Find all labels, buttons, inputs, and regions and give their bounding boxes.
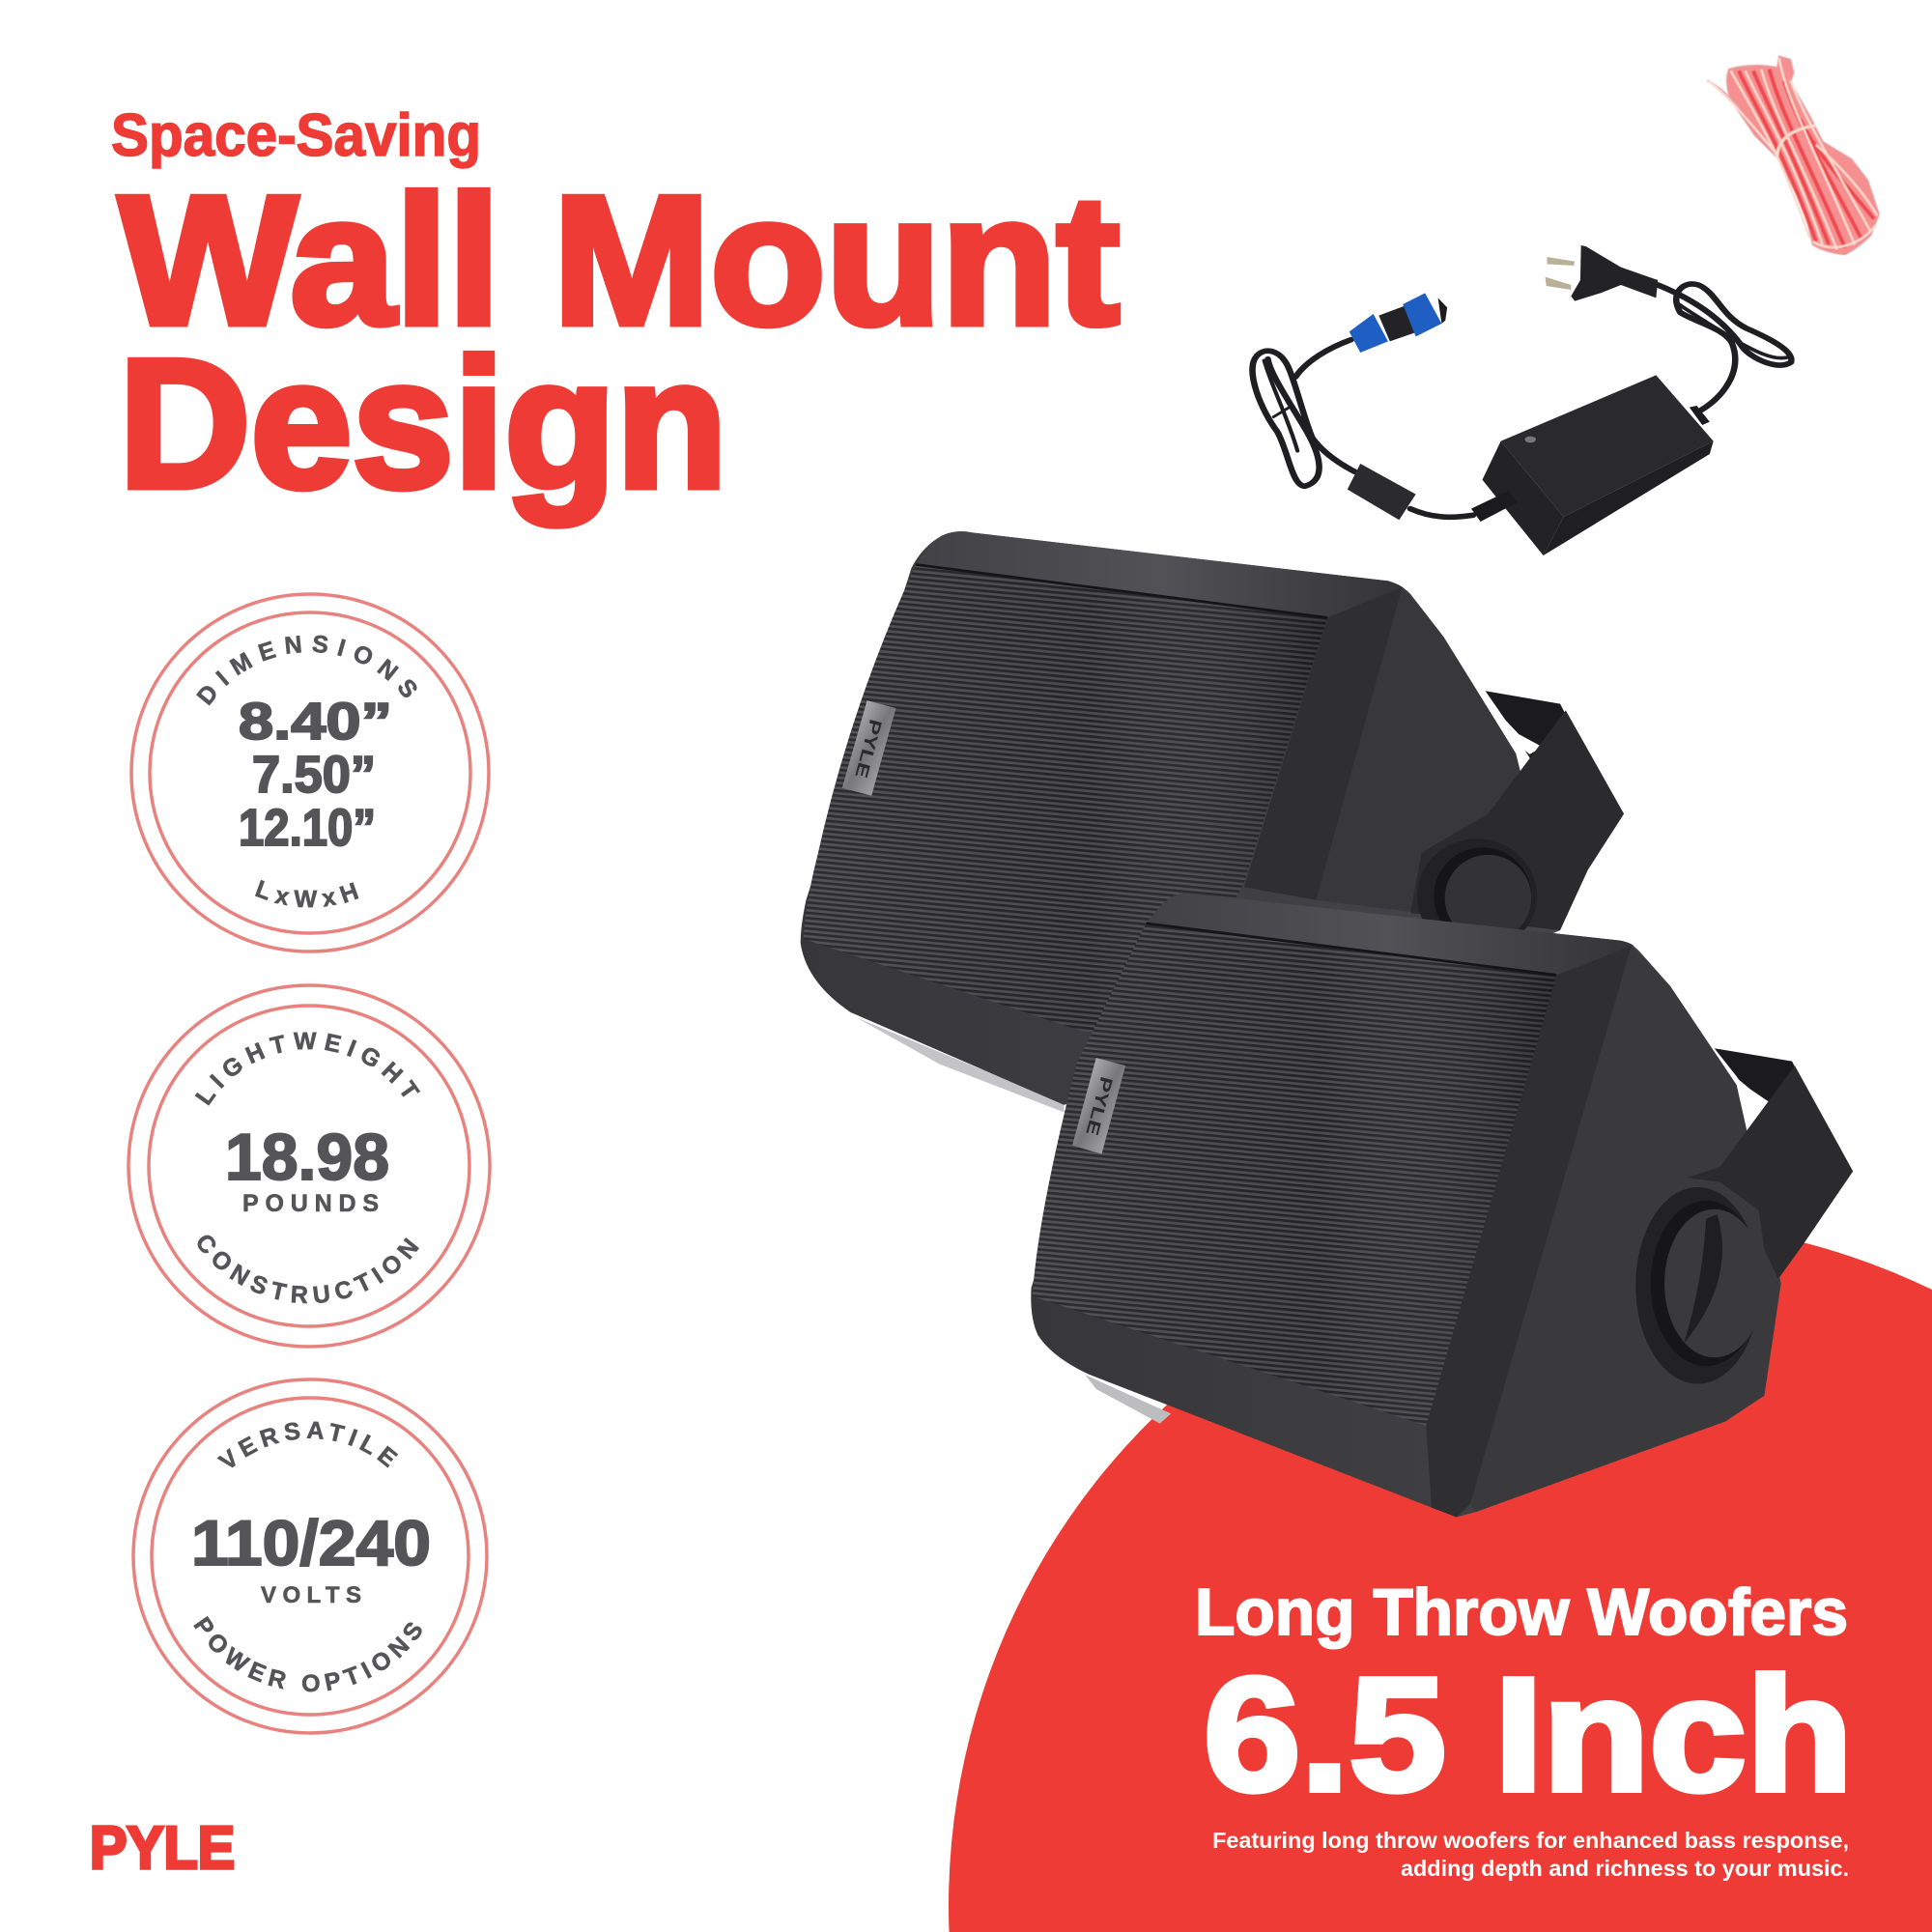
badge: lightweight: [127, 983, 492, 1349]
badge: dimensions: DIMENSIONS: [196, 636, 417, 705]
text: badge label on rear speaker: PYLE: [851, 717, 886, 781]
badge: dimensions: 7.50”: [252, 746, 376, 804]
title: Wall Mount Design: [119, 158, 1120, 526]
red circle panel: [949, 1221, 1932, 1932]
text: badge label on front speaker: PYLE: [1082, 1074, 1117, 1138]
text: woofer description: [1212, 1828, 1849, 1881]
speaker: front unit: [1031, 894, 1853, 1517]
subtitle: Space-Saving: Space-Saving: [111, 102, 481, 169]
title: Wall Mount Design: Wall Mount: [119, 158, 1120, 363]
text: woofer description: adding depth and richness to your music.: [1401, 1856, 1849, 1881]
heading: Long Throw Woofers: Long Throw Woofers: [1195, 1576, 1848, 1649]
title: Wall Mount Design: Design: [119, 322, 727, 526]
badge: lightweight: CONSTRUCTION: [197, 1235, 419, 1304]
badge: versatile: VOLTS: [261, 1582, 361, 1608]
text: woofer description: Featuring long throw woofers for enhanced bass response,: [1212, 1828, 1849, 1853]
badge: versatile: POWER OPTIONS: [193, 1615, 422, 1692]
badge: versatile: VERSATILE: [216, 1422, 398, 1468]
icon: speaker wire coil: [1707, 56, 1879, 254]
badge: dimensions: LxWxH: [255, 879, 359, 908]
badge: versatile: 110/240: [191, 1507, 431, 1578]
badge: dimensions: 8.40”: [239, 693, 392, 751]
badge: dimensions: 12.10”: [239, 799, 376, 857]
badge: versatile: [131, 1378, 489, 1735]
heading: 6.5 Inch: 6.5 Inch: [1204, 1645, 1853, 1825]
badge: lightweight: 18.98: [225, 1121, 389, 1194]
badge: lightweight: LIGHTWEIGHT: [195, 1032, 421, 1106]
icon: power adapter with cables: [1253, 245, 1791, 555]
logo: PYLE: PYLE: [90, 1815, 235, 1882]
badge: lightweight: POUNDS: [242, 1190, 379, 1217]
badge: dimensions: [129, 592, 491, 953]
speaker: rear unit: [801, 531, 1624, 1112]
adapter cable and plug: [1253, 284, 1791, 517]
